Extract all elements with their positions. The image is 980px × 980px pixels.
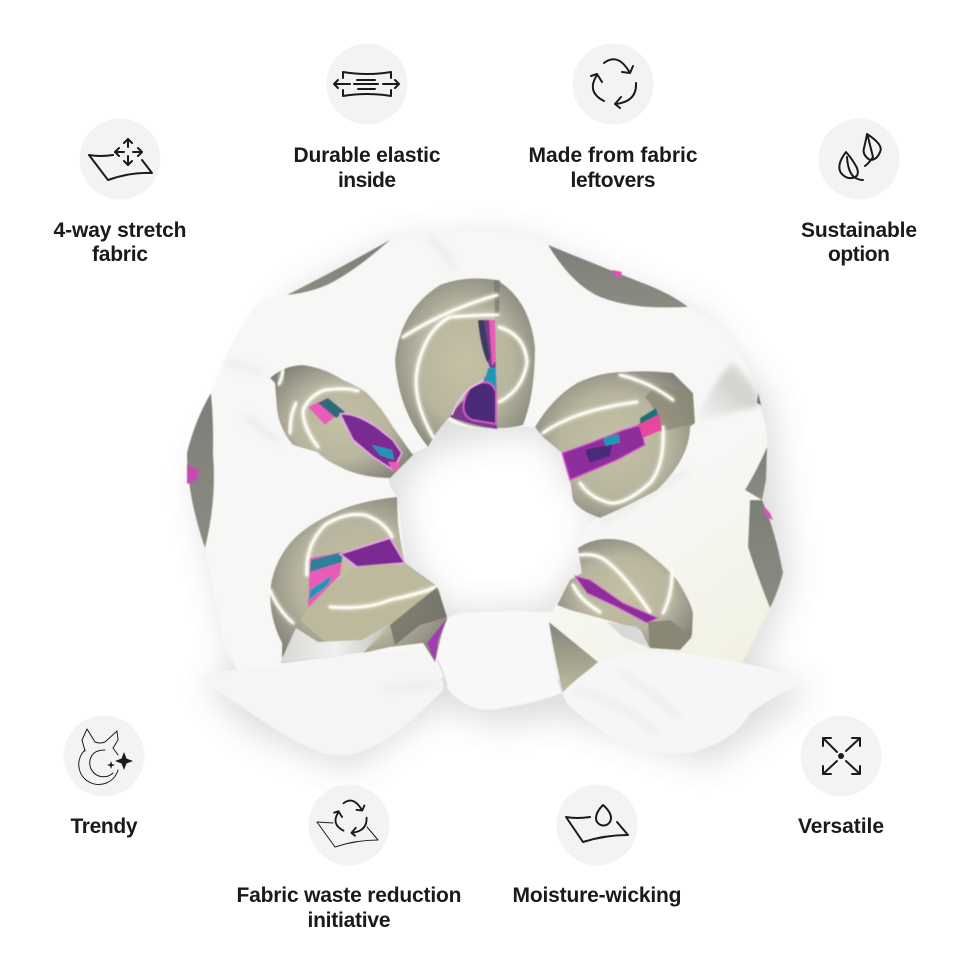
- right tail: [562, 652, 805, 753]
- label: Trendy: [70, 815, 138, 838]
- patch by knot: [549, 622, 598, 693]
- icon: water drop on fabric: [556, 784, 638, 866]
- edge patch: top right: [548, 245, 688, 308]
- label: Durable elastic: [294, 144, 441, 167]
- label: Made from fabric: [528, 144, 698, 167]
- label: initiative: [308, 909, 390, 932]
- feature: made from fabric leftovers: [528, 44, 698, 192]
- scrunchie body: [187, 231, 783, 680]
- product: scrunchie: [187, 231, 810, 770]
- tail folds: [385, 672, 680, 735]
- circle patch: right: [535, 371, 695, 518]
- left tail: [198, 652, 443, 755]
- circle patch: lower right: [557, 539, 693, 650]
- silver fold: [280, 622, 392, 663]
- label: option: [828, 243, 890, 266]
- fabric creases: [225, 235, 690, 525]
- ribbon motif: [308, 398, 402, 470]
- label: Sustainable: [801, 219, 917, 242]
- icon: fabric with recycle: [308, 784, 390, 866]
- edge patches: right: [757, 393, 761, 405]
- ribbon motif: [308, 538, 405, 608]
- ribbon motif: [562, 408, 662, 480]
- label: leftovers: [570, 169, 656, 192]
- ribbon motif: [575, 576, 658, 623]
- circle patch: top centre: [395, 278, 535, 447]
- feature: trendy: [64, 716, 144, 838]
- label: Versatile: [798, 815, 884, 838]
- icon: leaves: [818, 118, 900, 200]
- fold in patch: [300, 564, 437, 653]
- circle patch: left: [270, 365, 413, 478]
- circle patch: lower left: [270, 497, 447, 663]
- icon: 4-way stretch: [80, 118, 160, 200]
- soft shadow under scrunchie: [195, 237, 810, 770]
- label: inside: [338, 169, 396, 192]
- label: fabric: [92, 243, 148, 266]
- icon: expand arrows: [800, 716, 882, 796]
- label: 4-way stretch: [54, 219, 186, 242]
- edge patch: top left: [287, 240, 390, 295]
- feature: durable elastic inside: [294, 44, 441, 192]
- feature: moisture-wicking: [512, 784, 682, 907]
- label: Fabric waste reduction: [236, 884, 462, 907]
- knot: [436, 611, 562, 710]
- feature: fabric waste reduction initiative: [236, 784, 462, 932]
- label: Moisture-wicking: [512, 884, 682, 907]
- edge patch: left: [187, 393, 214, 548]
- icon: recycle: [572, 44, 654, 124]
- feature: sustainable option: [801, 118, 917, 266]
- feature: versatile: [798, 716, 884, 838]
- icon: elastic: [326, 44, 408, 124]
- feature: 4-way stretch fabric: [54, 118, 186, 266]
- ribbon motif: [450, 320, 497, 429]
- fold highlight right: [695, 362, 760, 423]
- small ribbon near knot: [427, 618, 447, 662]
- icon: cat and sparkle: [64, 716, 144, 796]
